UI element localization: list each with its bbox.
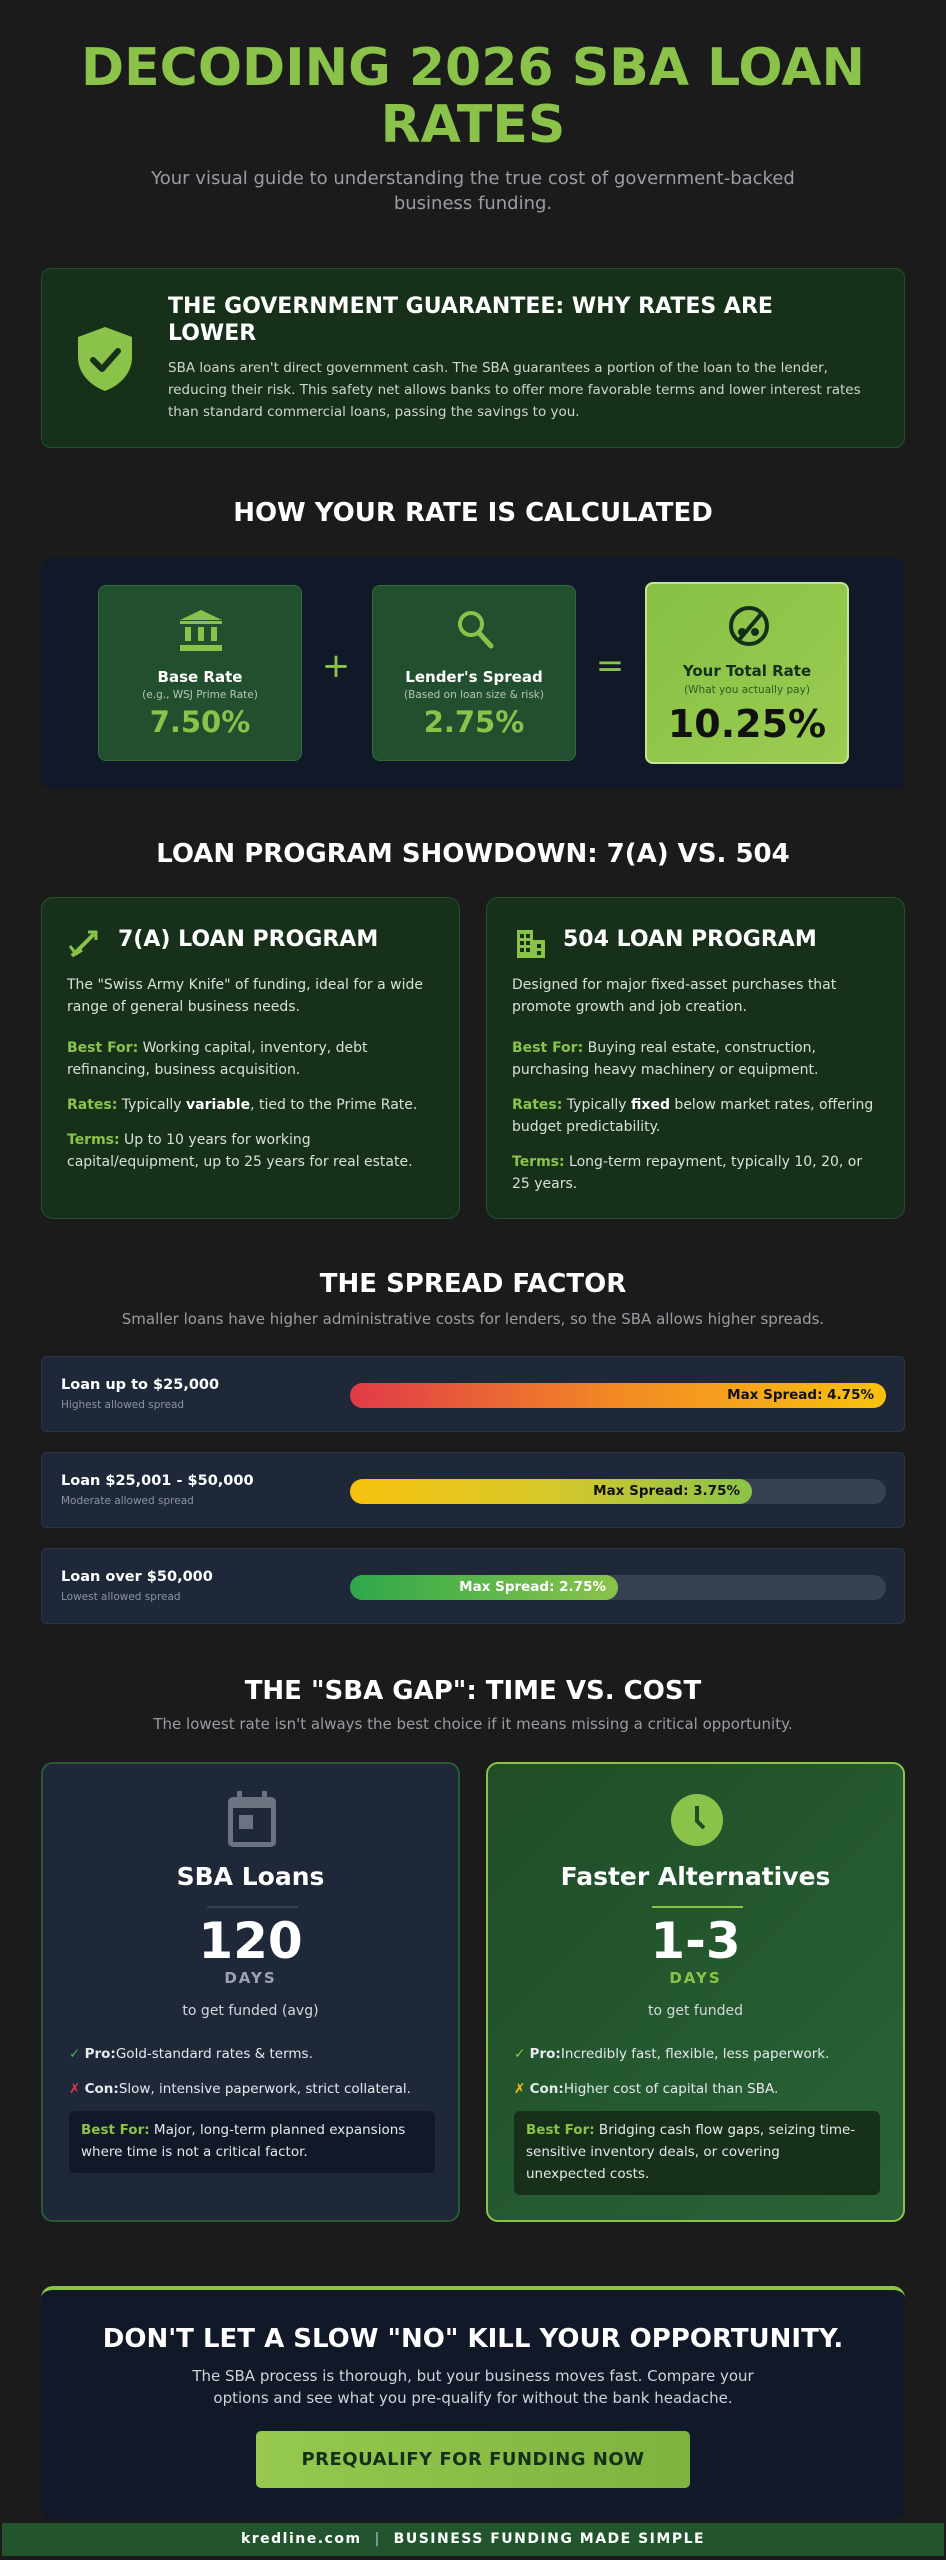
row: 25k-50k: Loan $25,001 - $50,000 — [61, 1473, 254, 1489]
card: 7(a) — [41, 897, 460, 1219]
card: 504: Terms: Long-term repayment, typically 10, 20, or 25 years. — [512, 1154, 862, 1192]
card: 7(a): The "Swiss Army Knife" of funding, ideal for a wide range of general business needs. — [67, 977, 423, 1015]
card: faster alternatives — [486, 1762, 905, 2222]
subheading: spread factor: Smaller loans have higher administrative costs for lenders, so the SBA allows higher spreads. — [122, 1310, 824, 1328]
icon: calendar — [228, 1791, 276, 1847]
card: sba loans — [41, 1762, 460, 2222]
card: faster alternatives: 1-3 — [650, 1912, 741, 1970]
cta heading: DON'T LET A SLOW "NO" KILL YOUR OPPORTUNITY. — [103, 2324, 843, 2354]
panel: rate calculation — [41, 557, 905, 789]
box: total rate — [645, 582, 849, 764]
subheading: sba gap: The lowest rate isn't always the best choice if it means missing a critical opportunity. — [153, 1715, 793, 1733]
box: base rate: Base Rate — [158, 668, 242, 686]
title: DECODING 2026 SBA LOAN RATES — [81, 38, 865, 155]
row: up to 25k: Loan up to $25,000 — [61, 1377, 219, 1393]
bar: 4.75% — [350, 1383, 886, 1408]
card: 504 — [486, 897, 905, 1219]
heading: how your rate is calculated: HOW YOUR RATE IS CALCULATED — [233, 498, 713, 528]
icon: magnifier — [458, 611, 494, 648]
button: PREQUALIFY FOR FUNDING NOW — [301, 2449, 645, 2470]
box: base rate: 7.50% — [150, 705, 250, 739]
box: total rate: (What you actually pay) — [684, 684, 810, 696]
body text: SBA loans aren't direct government cash. The SBA guarantees a portion of the loan to the lender, reducing their risk. This safety net allows banks to offer more favorable terms and lower interest rates than standard commercial loans, passing the savings to you. — [168, 360, 861, 420]
box: lender spread — [372, 585, 576, 761]
card: sba loans: 120 — [198, 1912, 303, 1970]
card: sba loans: ✓ Pro:Gold-standard rates & terms. — [69, 2046, 313, 2062]
bar: 4.75%: Max Spread: 4.75% — [727, 1387, 874, 1403]
card: 7(a): 7(A) LOAN PROGRAM — [118, 927, 378, 952]
heading: sba gap: THE "SBA GAP": TIME VS. COST — [245, 1676, 701, 1706]
bar: 3.75% — [350, 1479, 886, 1504]
box: lender spread: 2.75% — [424, 705, 524, 739]
bar: 2.75% — [350, 1575, 886, 1600]
card: sba loans: SBA Loans — [177, 1862, 324, 1891]
bar: 2.75%: Max Spread: 2.75% — [459, 1579, 606, 1595]
heading: THE GOVERNMENT GUARANTEE: WHY RATES ARE LOWER — [168, 294, 773, 346]
button — [256, 2431, 690, 2488]
icon: clock — [671, 1794, 723, 1846]
box: lender spread: Lender's Spread — [405, 668, 543, 686]
box: lender spread: (Based on loan size & risk) — [404, 689, 544, 701]
cta text: The SBA process is thorough, but your business moves fast. Compare your options and see what you pre-qualify for without the bank headache. — [192, 2367, 754, 2407]
bar: 3.75%: Max Spread: 3.75% — [593, 1483, 740, 1499]
card: sba loans: Best For: Major, long-term planned expansions where time is not a critical factor. — [81, 2122, 405, 2160]
row: over 50k — [41, 1548, 905, 1624]
icon: shield — [78, 327, 132, 391]
card: faster alternatives: ✓ Pro:Incredibly fast, flexible, less paperwork. — [514, 2046, 829, 2062]
footer: kredline.com | BUSINESS FUNDING MADE SIMPLE — [241, 2531, 705, 2547]
card: sba loans: DAYS — [224, 1969, 277, 1987]
panel: call to action — [41, 2286, 905, 2520]
card: 7(a): Rates: Typically variable, tied to the Prime Rate. — [67, 1097, 417, 1113]
card: 504: Best For: Buying real estate, construction, purchasing heavy machinery or equipment. — [512, 1040, 818, 1078]
card: sba loans: ✗ Con:Slow, intensive paperwork, strict collateral. — [69, 2081, 411, 2097]
heading: spread factor: THE SPREAD FACTOR — [320, 1269, 626, 1299]
row: over 50k: Lowest allowed spread — [61, 1591, 181, 1603]
heading: loan program showdown: LOAN PROGRAM SHOWDOWN: 7(A) VS. 504 — [156, 839, 790, 869]
card: 7(a): Terms: Up to 10 years for working capital/equipment, up to 25 years for real estate. — [67, 1132, 413, 1170]
icon: tool — [68, 930, 98, 958]
card: faster alternatives: DAYS — [669, 1969, 722, 1987]
box: total rate: 10.25% — [668, 702, 826, 746]
card: 504: 504 LOAN PROGRAM — [563, 927, 817, 952]
box: base rate: (e.g., WSJ Prime Rate) — [142, 689, 258, 701]
card: 7(a): Best For: Working capital, inventory, debt refinancing, business acquisition. — [67, 1040, 368, 1078]
icon: bank — [180, 610, 222, 651]
row: up to 25k — [41, 1356, 905, 1432]
row: over 50k: Loan over $50,000 — [61, 1569, 213, 1585]
card: faster alternatives: ✗ Con:Higher cost of capital than SBA. — [514, 2081, 778, 2097]
card: faster alternatives: Faster Alternatives — [561, 1862, 830, 1891]
icon: building — [517, 930, 545, 958]
row: 25k-50k — [41, 1452, 905, 1528]
row: 25k-50k: Moderate allowed spread — [61, 1495, 194, 1507]
panel: government guarantee — [41, 268, 905, 448]
box: base rate — [98, 585, 302, 761]
card: sba loans: to get funded (avg) — [182, 2003, 319, 2019]
icon: gauge — [729, 606, 769, 646]
row: up to 25k: Highest allowed spread — [61, 1399, 184, 1411]
subtitle: Your visual guide to understanding the true cost of government-backed business funding. — [151, 168, 795, 214]
card: 504: Designed for major fixed-asset purchases that promote growth and job creation. — [512, 977, 836, 1015]
icon: plus: + — [322, 646, 350, 686]
icon: equals: = — [596, 646, 624, 686]
box: total rate: Your Total Rate — [683, 662, 811, 680]
footer — [2, 2523, 944, 2556]
card: faster alternatives: Best For: Bridging cash flow gaps, seizing time-sensitive inventory deals, or covering unexpected costs. — [526, 2122, 855, 2182]
card: 504: Rates: Typically fixed below market rates, offering budget predictability. — [512, 1097, 873, 1135]
card: faster alternatives: to get funded — [648, 2003, 743, 2019]
